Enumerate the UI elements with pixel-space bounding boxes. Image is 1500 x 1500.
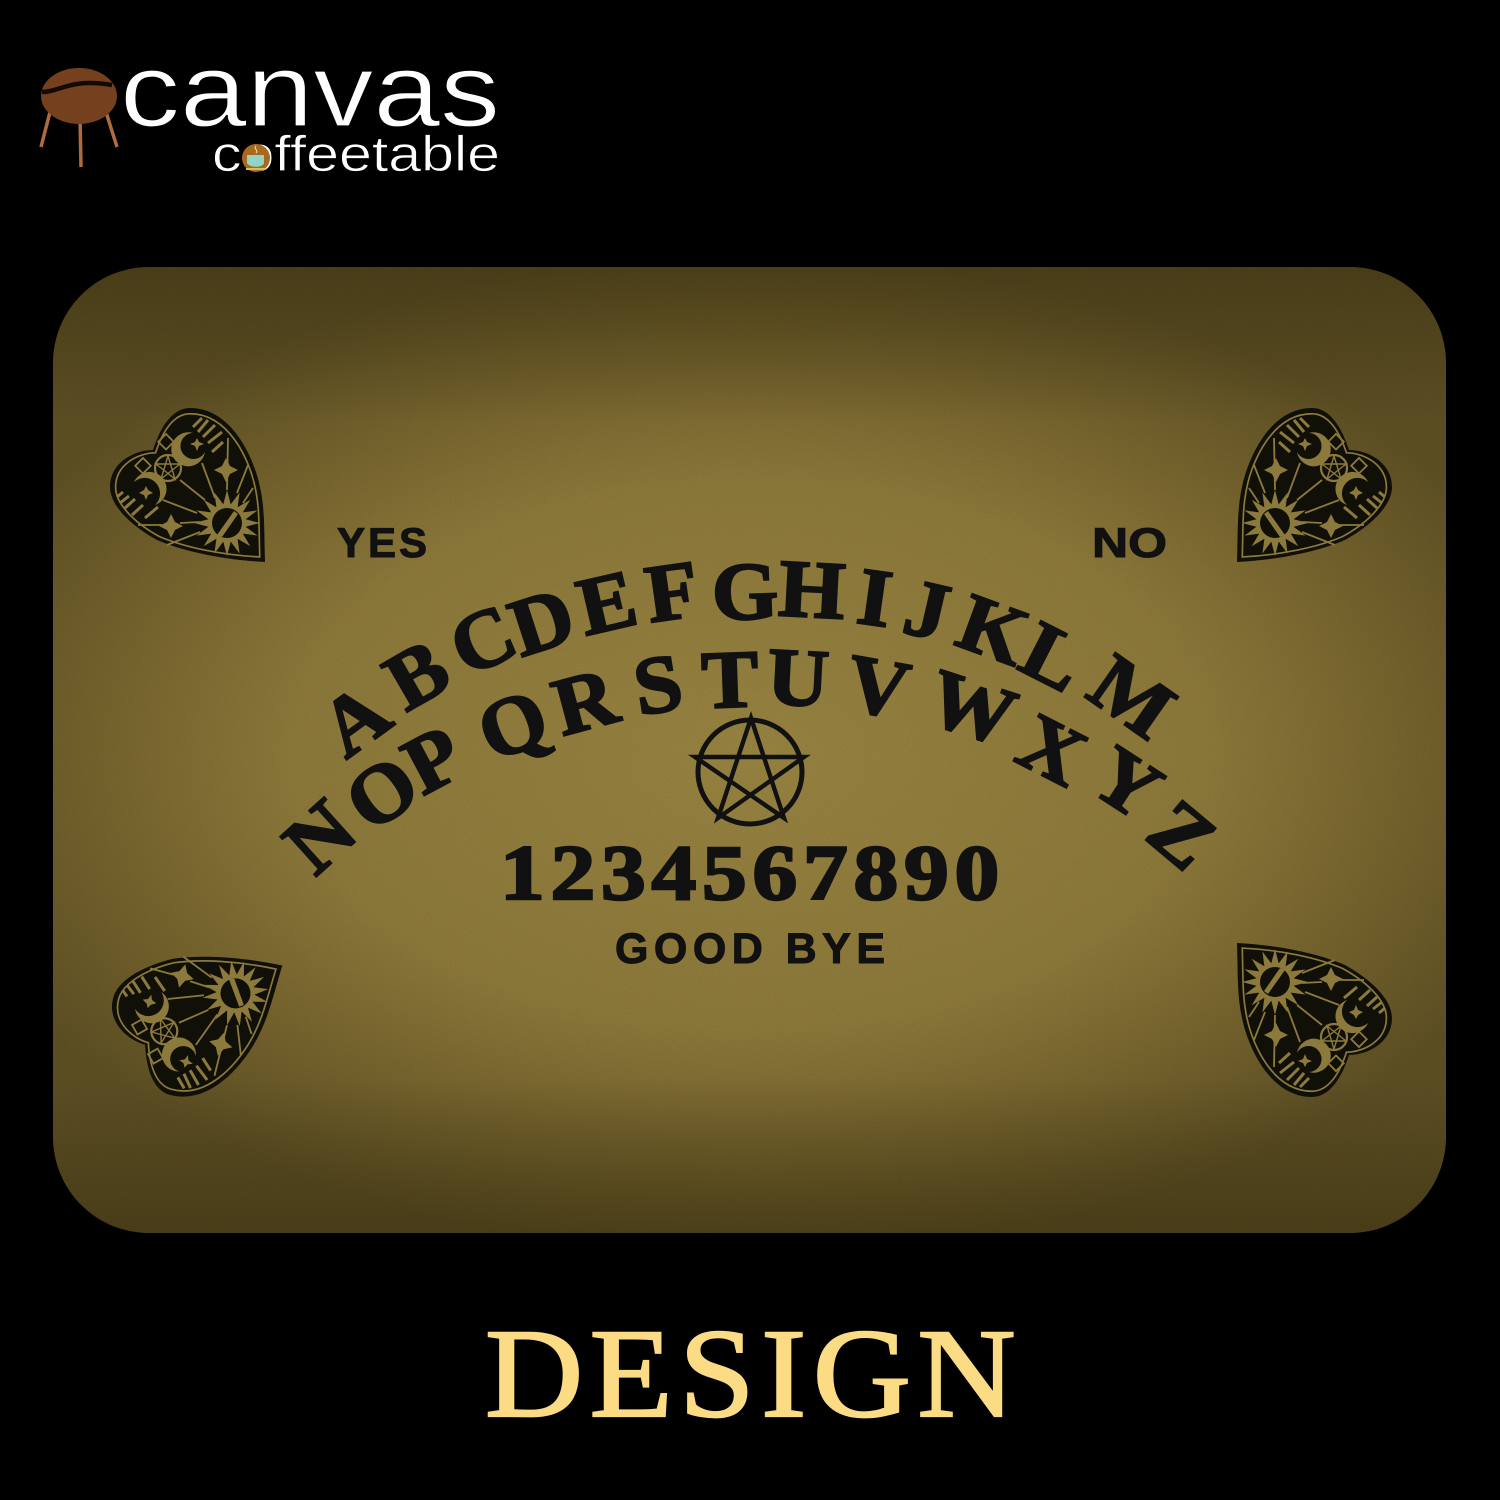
alphabet arc row one: E: [569, 552, 645, 654]
alphabet arc row two: Y: [1076, 728, 1178, 838]
alphabet arc row one: B: [370, 621, 464, 729]
alphabet arc row one: D: [499, 569, 585, 675]
alphabet arc row one: [303, 543, 1191, 775]
alphabet arc row one: A: [303, 665, 407, 775]
alphabet arc row one: H: [776, 543, 848, 637]
alphabet arc row two: S: [627, 636, 689, 734]
icon: coffee bean table: [41, 68, 117, 167]
alphabet arc row two: U: [765, 631, 831, 725]
logo: canvas coffeetable: [41, 33, 500, 182]
label: no: NO: [1092, 519, 1167, 566]
title: design: DESIGN: [485, 1304, 1022, 1444]
alphabet arc row one: J: [896, 561, 958, 659]
alphabet arc row one: F: [640, 543, 704, 641]
alphabet arc row two: X: [1004, 695, 1100, 805]
alphabet arc row one: I: [852, 551, 898, 645]
alphabet arc row one: G: [710, 545, 780, 639]
icon: heart planchette bottom left: [93, 925, 282, 1114]
icon: pentagram: [695, 718, 804, 824]
icon: coffee cup: [242, 144, 270, 172]
alphabet arc row one: K: [946, 576, 1040, 684]
logo word: canvas: canvas: [120, 33, 500, 149]
alphabet arc row two: R: [543, 650, 628, 754]
alphabet arc row two: V: [840, 637, 916, 737]
icon: heart planchette top left: [110, 408, 265, 562]
label: yes: YES: [337, 519, 427, 566]
alphabet arc row two: T: [700, 634, 760, 727]
alphabet arc row two: P: [389, 708, 477, 813]
alphabet arc row two: O: [329, 737, 435, 849]
icon: heart planchette top right: [1237, 408, 1392, 562]
logo word: coffeetable: coffeetable: [212, 126, 500, 182]
alphabet arc row two: [267, 631, 1233, 892]
alphabet arc row two: W: [917, 652, 1027, 765]
icon: heart planchette bottom right: [1237, 943, 1392, 1097]
panel: ouija board: [53, 267, 1446, 1233]
alphabet arc row one: C: [436, 586, 530, 694]
alphabet arc row two: N: [267, 783, 373, 892]
alphabet arc row two: Z: [1131, 782, 1233, 888]
label: good bye: GOOD BYE: [615, 925, 885, 973]
numbers row: 1234567890: [500, 829, 1005, 916]
alphabet arc row two: Q: [465, 670, 561, 780]
alphabet arc row one: M: [1073, 637, 1191, 757]
alphabet arc row one: L: [1007, 604, 1099, 711]
